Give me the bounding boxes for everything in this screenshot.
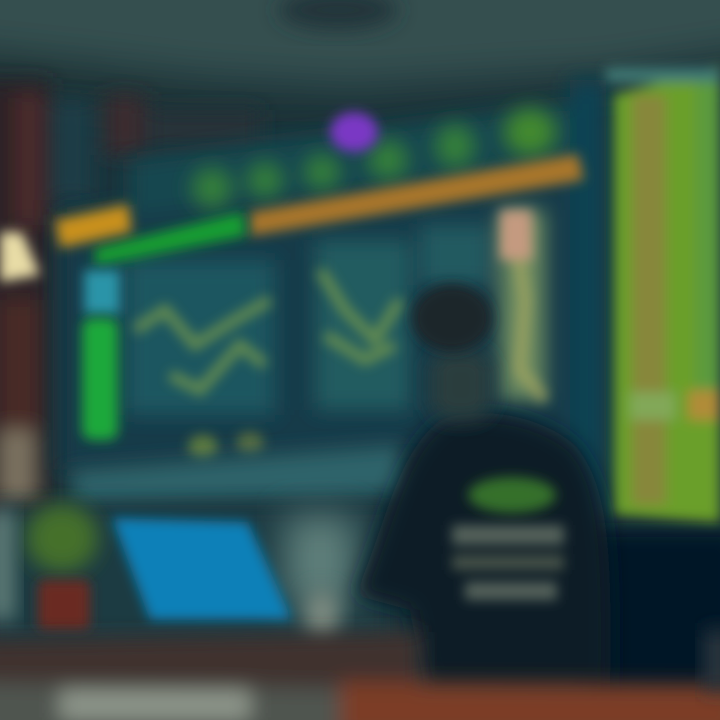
green vertical bar [82, 318, 118, 440]
ceiling [0, 0, 720, 125]
right green panel [606, 65, 720, 525]
chart traces [135, 230, 545, 400]
chart panels [125, 210, 545, 415]
shirt logo green [468, 477, 556, 513]
lower screen markers [188, 432, 264, 459]
left wall with shelves [0, 80, 260, 540]
person neck [430, 350, 492, 420]
purple marker [330, 112, 378, 152]
right dark monitor [590, 530, 720, 695]
ceiling lamp [278, 0, 398, 30]
green ticker bar [95, 212, 246, 266]
papers beside laptop [285, 515, 355, 605]
desk shelf behind laptop [70, 445, 410, 505]
pale vertical strip top [500, 210, 532, 260]
right edge detail [705, 630, 720, 690]
lower room area [0, 505, 390, 645]
wall lamp [0, 232, 40, 282]
plant pot [38, 580, 90, 630]
light blue tile [84, 270, 120, 314]
plant [26, 504, 98, 572]
laptop screen [112, 518, 292, 620]
orange ticker bar [250, 154, 584, 236]
shirt logo text band [452, 525, 564, 600]
main screen wall [60, 80, 606, 520]
desk surface [0, 632, 720, 720]
left foreground object [0, 510, 14, 620]
yellow ticker bar [55, 204, 132, 248]
hand [304, 589, 340, 641]
person body [355, 413, 611, 690]
person [304, 284, 611, 690]
green market dots [192, 108, 556, 208]
person head [412, 284, 492, 352]
